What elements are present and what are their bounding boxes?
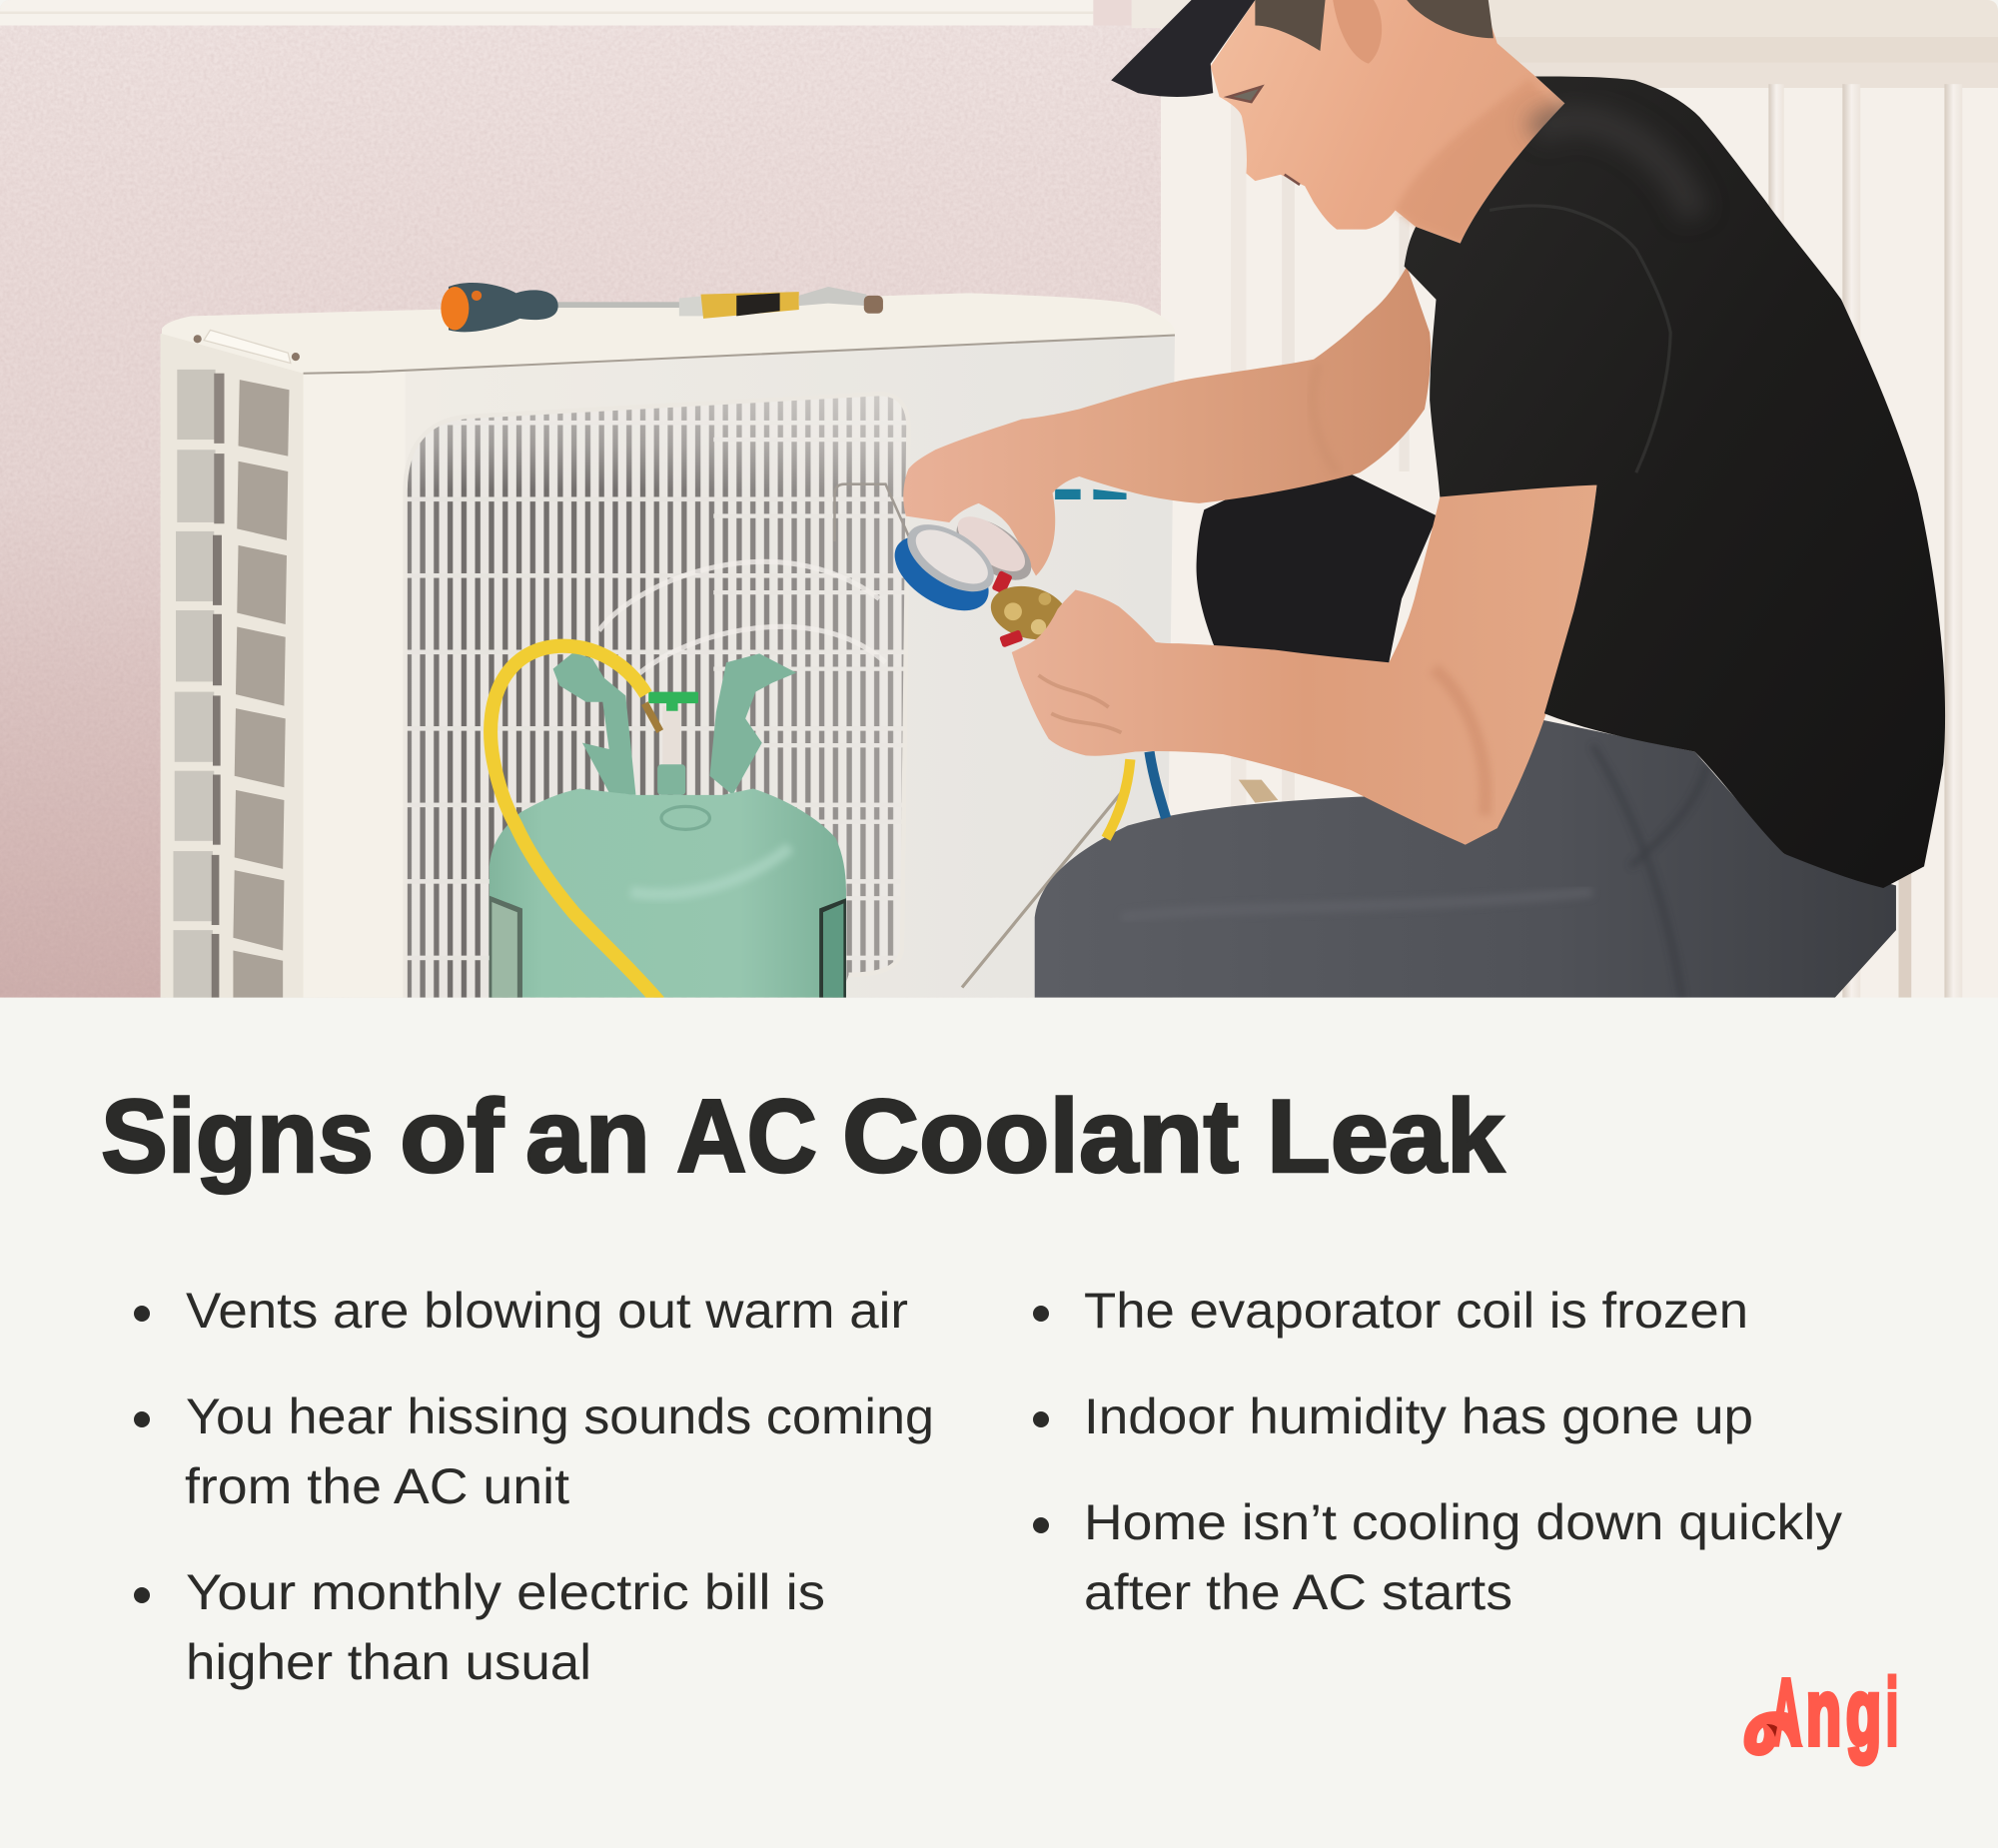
bullet: frozen coil: The evaporator coil is frozen: [1084, 1283, 1748, 1339]
bullet: slow cooling: after the AC starts: [1084, 1564, 1512, 1620]
AC outdoor unit: [161, 293, 1175, 1000]
teal sticker marks: [1055, 489, 1127, 499]
white ribbed siding: [1132, 0, 1998, 998]
bullet: hissing sounds: [134, 1388, 934, 1514]
bullet: electric bill: [134, 1564, 825, 1690]
yellow hose: [491, 646, 658, 1002]
title: Coolant: [842, 1079, 1239, 1195]
tank labels: [490, 896, 846, 998]
hoses at the gauge: [1106, 752, 1166, 838]
icon: screwdriver: [441, 283, 684, 332]
grey work pants: [1035, 720, 1896, 998]
fan grille: [406, 389, 915, 1000]
Angi logo: [1750, 1660, 1898, 1764]
title: Leak: [1267, 1079, 1504, 1195]
gauge manifold: [895, 517, 1063, 647]
unit body: [161, 334, 1175, 998]
bullet: slow cooling: Home isn’t cooling down quickly: [1084, 1494, 1842, 1550]
bullet: electric bill: Your monthly electric bill is: [186, 1564, 825, 1620]
tank body: [490, 789, 846, 998]
tank valve: [644, 692, 698, 795]
photo: technician checking AC unit: [0, 0, 1998, 1002]
hair: [1255, 0, 1494, 51]
title: an: [525, 1079, 650, 1195]
front arm and hand: [1012, 476, 1597, 845]
lid: [162, 293, 1175, 374]
infographic canvas: i: [1886, 1660, 1898, 1764]
black t-shirt: [1405, 77, 1945, 888]
technician: [882, 0, 1945, 998]
Angi logo: g: [1846, 1660, 1881, 1764]
dark upper leg: [1197, 474, 1436, 663]
Angi logo: A: [1771, 1660, 1801, 1764]
bullet: hissing sounds: from the AC unit: [185, 1458, 569, 1514]
left column list: [134, 1283, 934, 1690]
bullet: electric bill: higher than usual: [186, 1634, 591, 1690]
head and neck: [1211, 0, 1564, 244]
wall: [0, 0, 1172, 998]
icon: ratchet wrench: [679, 287, 883, 319]
side vent windows: [173, 370, 290, 998]
tools on the unit: [441, 283, 883, 332]
bullet: humidity: Indoor humidity has gone up: [1084, 1388, 1753, 1444]
bullet: slow cooling: [1033, 1494, 1842, 1620]
baseball cap: [1111, 0, 1255, 97]
ear: [1333, 0, 1382, 64]
refrigerant tank with yellow hose: [490, 646, 846, 1002]
bullet: hissing sounds: You hear hissing sounds coming: [186, 1388, 934, 1444]
upper arm and hand: [903, 267, 1431, 576]
diagonal service wire: [962, 792, 1121, 988]
title: AC: [676, 1079, 817, 1195]
tank handles: [553, 652, 796, 795]
title: of: [400, 1079, 503, 1195]
eye and lips: [1229, 87, 1300, 185]
bullet: vents: Vents are blowing out warm air: [186, 1283, 908, 1339]
rope detail: [1239, 780, 1278, 803]
Angi logo: n: [1806, 1660, 1841, 1764]
right column list: [1033, 1283, 1842, 1620]
title: Signs: [101, 1079, 374, 1195]
